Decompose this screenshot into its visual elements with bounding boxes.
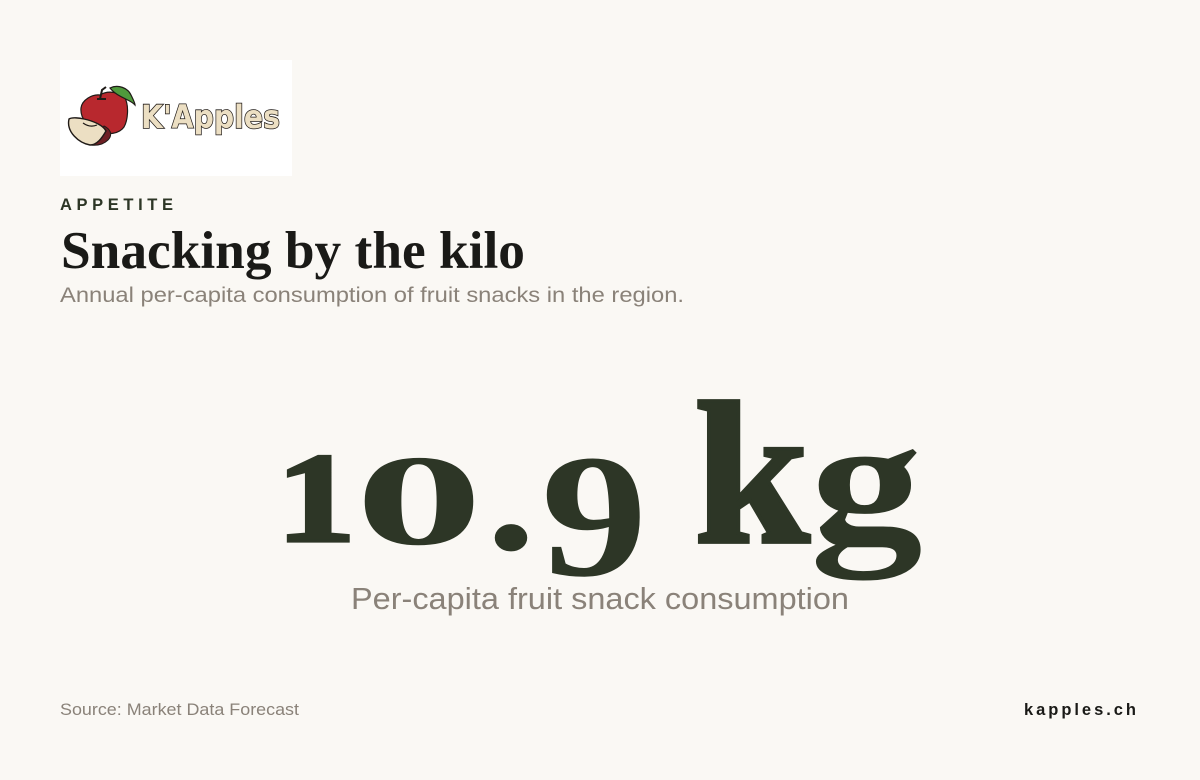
source: Source: Market Data Forecast (60, 700, 299, 719)
icon: apple slice (69, 118, 106, 145)
big number: 10.9 kg: g (810, 382, 923, 581)
icon: apple leaf (110, 86, 135, 105)
big number: 10.9 kg: 1 (276, 428, 356, 569)
icon: apple stem (97, 87, 106, 99)
icon: slice skin (90, 126, 111, 145)
big number: 10.9 kg: k (694, 362, 810, 586)
big number: 10.9 kg: 0 (355, 428, 483, 572)
title: Snacking by the kilo (61, 222, 525, 280)
icon: slice core (83, 123, 97, 126)
icon: apple body (81, 92, 128, 134)
caption: Per-capita fruit snack consumption (351, 581, 849, 616)
subtitle: Annual per-capita consumption of fruit snacks in the region. (60, 284, 684, 307)
logo wordmark: K'Apples (141, 98, 280, 136)
logo: K'Apples (60, 60, 292, 176)
eyebrow: APPETITE: APPETITE (60, 196, 173, 214)
big number: 10.9 kg: 9 (541, 419, 647, 614)
big number: 10.9 kg: . (486, 399, 536, 585)
big number: 10.9 kg (276, 362, 923, 614)
site link: kapples.ch (1024, 701, 1136, 719)
